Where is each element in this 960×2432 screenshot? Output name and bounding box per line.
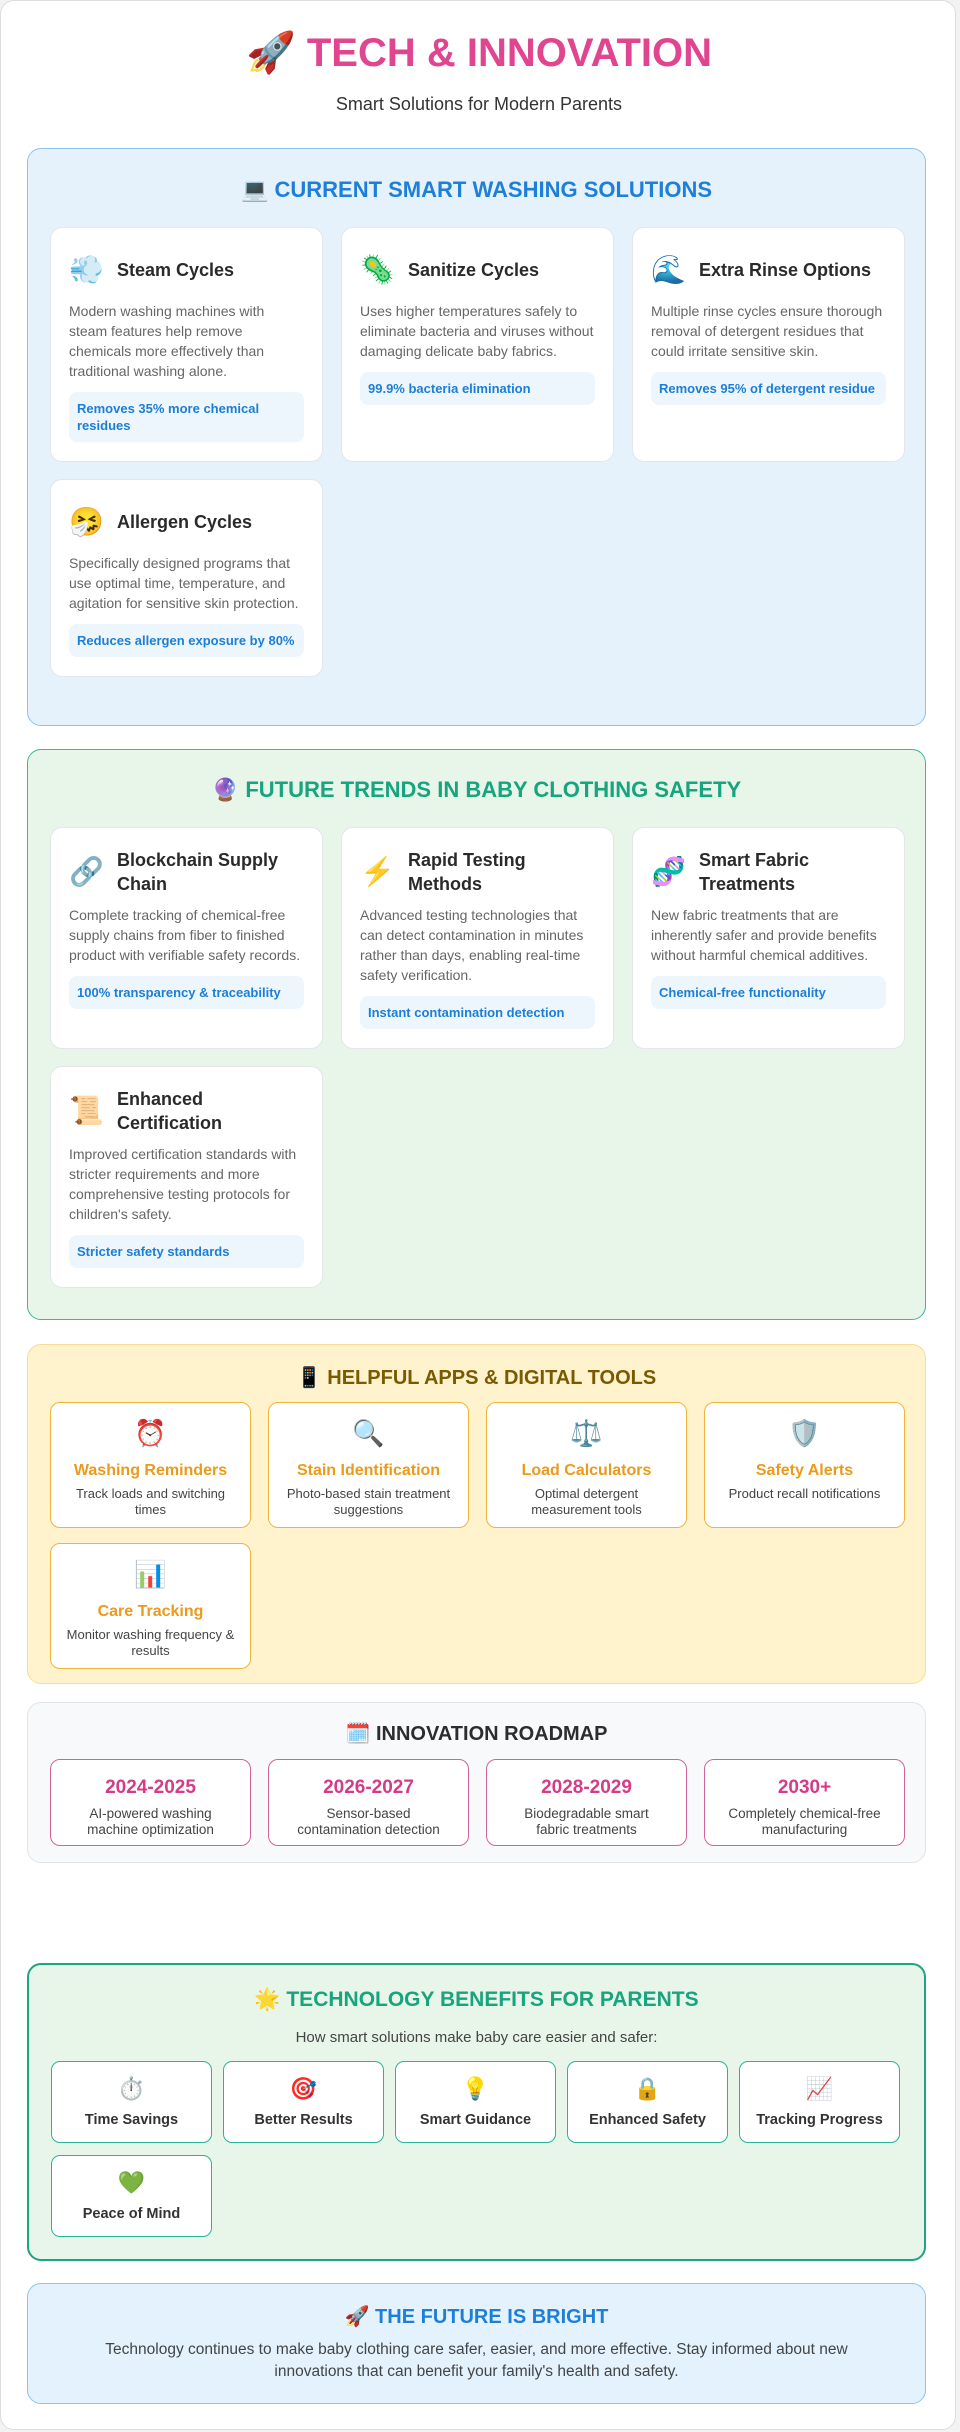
app: safety alerts	[704, 1402, 905, 1528]
card: allergen cycles: Specifically designed programs that use optimal time, temperature, and agitation for sensitive skin protection.	[69, 555, 299, 611]
app: care tracking	[50, 1543, 251, 1669]
card: extra rinse: Removes 95% of detergent residue	[659, 381, 875, 396]
card: rapid testing	[341, 827, 614, 1049]
card: rapid testing: Advanced testing technologies that can detect contamination in minutes rather than days, enabling real-time safety verification.	[360, 907, 583, 983]
panel: helpful apps	[27, 1344, 926, 1684]
title: 🚀 TECH & INNOVATION	[246, 31, 712, 75]
card: steam cycles: Removes 35% more chemical residues	[77, 401, 259, 433]
roadmap: 2024-2025: machine optimization	[87, 1822, 214, 1837]
benefit: tracking progress	[739, 2061, 900, 2143]
roadmap: 2028-2029: fabric treatments	[536, 1822, 637, 1837]
benefit: tracking progress: Tracking Progress	[756, 2112, 883, 2128]
benefit: time savings: Time Savings	[85, 2112, 178, 2128]
card: steam cycles: Steam Cycles	[117, 260, 234, 280]
card: enhanced certification: Improved certification standards with stricter requirements and more comprehensive testing protocols for children's safety.	[69, 1146, 296, 1222]
card: extra rinse: Extra Rinse Options	[699, 260, 871, 280]
card: extra rinse: Multiple rinse cycles ensure thorough removal of detergent residues that could irritate sensitive skin.	[651, 303, 882, 359]
benefit: smart guidance: 💡	[462, 2076, 489, 2101]
card: enhanced certification: Enhanced Certification	[117, 1089, 222, 1133]
benefit: enhanced safety	[567, 2061, 728, 2143]
heading: helpful apps: 📱 HELPFUL APPS & DIGITAL TOOLS	[297, 1367, 656, 1389]
app: stain identification: Stain Identification	[297, 1462, 440, 1479]
benefit: better results: 🎯	[290, 2076, 317, 2101]
app: load calculators: ⚖️	[570, 1418, 603, 1448]
card: allergen cycles: Reduces allergen exposure by 80%	[77, 633, 294, 648]
roadmap: 2026-2027: 2026-2027	[323, 1777, 414, 1798]
card: allergen cycles: 🤧	[69, 506, 104, 537]
app: safety alerts: 🛡️	[788, 1418, 821, 1448]
card: blockchain: 🔗	[69, 856, 104, 887]
app: safety alerts: Safety Alerts	[756, 1462, 853, 1479]
card: allergen cycles: Allergen Cycles	[117, 512, 252, 532]
card: sanitize cycles: Sanitize Cycles	[408, 260, 539, 280]
roadmap: 2024-2025: AI-powered washing	[89, 1806, 212, 1821]
card: steam cycles: 💨	[69, 254, 104, 285]
card: blockchain	[50, 827, 323, 1049]
card: extra rinse: 🌊	[651, 254, 686, 285]
benefit: peace of mind	[51, 2155, 212, 2237]
roadmap: 2028-2029	[486, 1759, 687, 1846]
benefit: peace of mind: Peace of Mind	[83, 2206, 180, 2222]
panel: innovation roadmap	[27, 1702, 926, 1863]
roadmap: 2024-2025	[50, 1759, 251, 1846]
heading: future trends: 🔮 FUTURE TRENDS IN BABY CLOTHING SAFETY	[212, 777, 741, 802]
subtitle: Smart Solutions for Modern Parents	[336, 94, 622, 114]
card: enhanced certification	[50, 1066, 323, 1288]
app: safety alerts: Product recall notifications	[729, 1486, 880, 1501]
roadmap: 2030+: manufacturing	[762, 1822, 847, 1837]
card: blockchain: Blockchain Supply Chain	[117, 850, 278, 894]
benefit: enhanced safety: Enhanced Safety	[589, 2112, 706, 2128]
card: smart fabric: Smart Fabric Treatments	[699, 850, 809, 894]
panel: future trends	[27, 749, 926, 1320]
app: load calculators	[486, 1402, 687, 1528]
benefit: smart guidance: Smart Guidance	[420, 2112, 531, 2128]
roadmap: 2026-2027: Sensor-based	[326, 1806, 411, 1821]
card: steam cycles	[50, 227, 323, 462]
card: rapid testing: Rapid Testing Methods	[408, 850, 526, 894]
card: enhanced certification: 📜	[69, 1095, 104, 1126]
roadmap: 2024-2025: 2024-2025	[105, 1777, 196, 1798]
roadmap: 2030+	[704, 1759, 905, 1846]
card: sanitize cycles	[341, 227, 614, 462]
benefit: better results: Better Results	[254, 2112, 353, 2128]
card: blockchain: Complete tracking of chemical-free supply chains from fiber to finished product with verifiable safety records.	[69, 907, 300, 963]
card: allergen cycles	[50, 479, 323, 677]
app: care tracking: 📊	[134, 1559, 167, 1589]
card: blockchain: 100% transparency & traceability	[77, 985, 281, 1000]
card: smart fabric: 🧬	[651, 856, 686, 887]
text: benefits intro: How smart solutions make baby care easier and safer:	[296, 2029, 657, 2046]
app: load calculators: Load Calculators	[522, 1462, 651, 1479]
card: sanitize cycles: 🦠	[360, 254, 395, 285]
panel: the future is bright	[27, 2283, 926, 2404]
app: washing reminders: Track loads and switching times	[76, 1486, 225, 1516]
benefit: better results	[223, 2061, 384, 2143]
card: smart fabric: New fabric treatments that are inherently safer and provide benefits without harmful chemical additives.	[651, 907, 877, 963]
benefit: time savings	[51, 2061, 212, 2143]
heading: current smart washing solutions: 💻 CURRENT SMART WASHING SOLUTIONS	[241, 177, 712, 202]
app: washing reminders: ⏰	[134, 1418, 167, 1448]
card: sanitize cycles: Uses higher temperatures safely to eliminate bacteria and viruses without damaging delicate baby fabrics.	[360, 303, 593, 359]
app: load calculators: Optimal detergent measurement tools	[531, 1486, 642, 1516]
heading: roadmap: 🗓️ INNOVATION ROADMAP	[346, 1723, 607, 1745]
heading: future is bright: 🚀 THE FUTURE IS BRIGHT	[345, 2306, 608, 2328]
card: steam cycles: Modern washing machines with steam features help remove chemicals more effectively than traditional washing alone.	[69, 303, 264, 379]
card: sanitize cycles: 99.9% bacteria elimination	[368, 381, 531, 396]
roadmap: 2030+: 2030+	[778, 1777, 831, 1798]
roadmap: 2028-2029: Biodegradable smart	[524, 1806, 649, 1821]
app: stain identification: Photo-based stain treatment suggestions	[287, 1486, 450, 1516]
app: stain identification	[268, 1402, 469, 1528]
roadmap: 2026-2027	[268, 1759, 469, 1846]
card: enhanced certification: Stricter safety standards	[77, 1244, 229, 1259]
panel: technology benefits	[27, 1963, 926, 2261]
card: smart fabric	[632, 827, 905, 1049]
card: extra rinse	[632, 227, 905, 462]
benefit: time savings: ⏱️	[118, 2076, 145, 2101]
benefit: peace of mind: 💚	[118, 2170, 145, 2195]
app: washing reminders: Washing Reminders	[74, 1462, 227, 1479]
benefit: tracking progress: 📈	[806, 2076, 833, 2101]
roadmap: 2026-2027: contamination detection	[297, 1822, 440, 1837]
app: care tracking: Monitor washing frequency & results	[67, 1627, 234, 1658]
app: stain identification: 🔍	[352, 1418, 385, 1448]
card: rapid testing: Instant contamination detection	[368, 1005, 564, 1020]
card: rapid testing: ⚡	[360, 856, 395, 887]
benefit: enhanced safety: 🔒	[634, 2076, 661, 2101]
card: smart fabric: Chemical-free functionality	[659, 985, 826, 1000]
app: care tracking: Care Tracking	[98, 1603, 203, 1620]
roadmap: 2028-2029: 2028-2029	[541, 1777, 632, 1798]
heading: benefits: 🌟 TECHNOLOGY BENEFITS FOR PARENTS	[254, 1988, 699, 2011]
panel: current smart washing solutions	[27, 148, 926, 726]
text: closing message: Technology continues to make baby clothing care safer, easier, and more effective. Stay informed about new innovations that can benefit your family's health and safety.	[105, 2341, 848, 2380]
benefit: smart guidance	[395, 2061, 556, 2143]
roadmap: 2030+: Completely chemical-free	[728, 1806, 881, 1821]
app: washing reminders	[50, 1402, 251, 1528]
